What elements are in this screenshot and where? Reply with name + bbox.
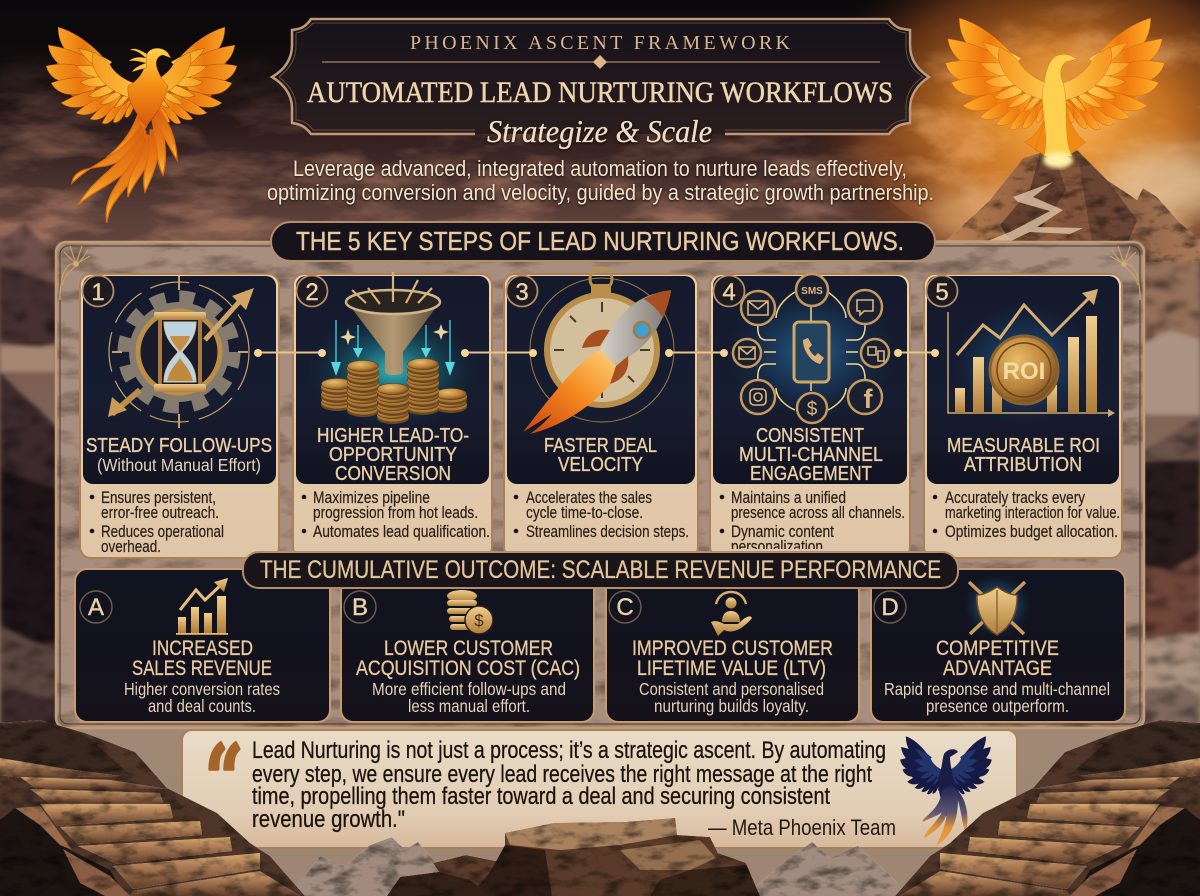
description — [124, 679, 280, 716]
quote text — [252, 737, 886, 833]
heading pill: cumulative outcome — [243, 552, 958, 588]
quote panel — [182, 725, 1017, 848]
card title — [317, 425, 469, 485]
clouds — [0, 50, 1200, 250]
quote text: revenue growth." — [252, 806, 405, 833]
quote mark: “ — [205, 725, 243, 833]
description: less manual effort. — [408, 696, 530, 716]
card title: FASTER DEAL — [544, 435, 657, 457]
quote text: time, propelling them faster toward a deal and securing consistent — [252, 783, 830, 810]
icon: phone with channels — [726, 274, 896, 423]
bullets: error-free outreach. — [101, 504, 219, 522]
number badge — [296, 276, 328, 306]
phoenix: navy logo — [900, 736, 992, 846]
icon: phone with channels: f — [864, 384, 874, 414]
icon: coins — [447, 590, 493, 634]
description: Leverage advanced, integrated automation to nurture leads effectively, — [293, 156, 907, 181]
badge — [344, 591, 376, 623]
bullets: presence across all channels. — [731, 504, 905, 522]
bullets: overhead. — [101, 538, 161, 556]
right side mountains — [1140, 235, 1200, 735]
left side mountains — [0, 222, 60, 735]
bullets — [90, 489, 224, 556]
volcano peak — [947, 150, 1200, 262]
mountain path — [975, 182, 1083, 246]
icon: ROI chart and coin: ROI — [1003, 358, 1045, 385]
bullets: cycle time-to-close. — [526, 504, 643, 522]
number badge — [714, 276, 744, 306]
central rock outcrop — [387, 818, 760, 896]
description: Higher conversion rates — [124, 679, 280, 699]
description: and deal counts. — [148, 696, 256, 716]
card title: MEASURABLE ROI — [947, 435, 1100, 457]
warm light around the peak base — [925, 185, 1045, 245]
card 2: lead to opportunity conversion — [293, 272, 492, 558]
title: LOWER CUSTOMER — [384, 637, 553, 660]
description — [267, 156, 934, 205]
bullets — [514, 489, 689, 541]
eyebrow: PHOENIX ASCENT FRAMEWORK — [410, 32, 791, 54]
title — [356, 637, 580, 680]
aura — [988, 45, 1128, 155]
card title: CONVERSION — [335, 463, 451, 485]
fire glow — [800, 0, 1200, 315]
title: COMPETITIVE — [936, 637, 1059, 660]
badge: C — [616, 594, 634, 621]
description: presence outperform. — [926, 696, 1069, 716]
corner filigree: top right — [1110, 246, 1140, 300]
phoenix: orange, top left — [46, 27, 237, 223]
icon: phone with channels: SMS — [801, 286, 823, 297]
icon: stopwatch and rocket — [523, 268, 674, 434]
description — [372, 679, 566, 716]
title: ADVANTAGE — [943, 657, 1052, 680]
badge — [609, 591, 641, 623]
distant mountains, foreground — [290, 837, 905, 896]
icon: phone with channels: $ — [807, 399, 818, 420]
icon: gear and hourglass — [108, 276, 254, 428]
connectors between steps — [254, 349, 939, 357]
card title — [739, 425, 883, 485]
main title: AUTOMATED LEAD NURTURING WORKFLOWS — [307, 76, 893, 109]
bullets: Maximizes pipeline — [313, 489, 430, 507]
icon: person in hand — [711, 592, 752, 636]
corner filigree: top left — [60, 246, 90, 300]
card title — [947, 435, 1100, 476]
card title — [544, 435, 657, 476]
heading pill: 5 key steps: THE 5 KEY STEPS OF LEAD NURTURING WORKFLOWS. — [296, 226, 904, 256]
title: IMPROVED CUSTOMER — [632, 637, 833, 660]
card title: ENGAGEMENT — [750, 463, 872, 485]
card title: (Without Manual Effort) — [97, 455, 261, 475]
subtitle: Strategize & Scale — [487, 113, 712, 149]
bullets — [933, 489, 1120, 541]
title: LIFETIME VALUE (LTV) — [637, 657, 826, 680]
card title: VELOCITY — [558, 454, 643, 476]
icon: coins: $ — [474, 611, 484, 630]
badge: A — [88, 594, 104, 621]
card title: OPPORTUNITY — [329, 444, 457, 466]
title: INCREASED — [152, 637, 253, 660]
card 5: measurable ROI attribution — [924, 274, 1122, 558]
bullets: Accelerates the sales — [526, 489, 652, 507]
quote text: Lead Nurturing is not just a process; it’s a strategic ascent. By automating — [252, 737, 886, 764]
number badge — [82, 276, 114, 306]
bullets: Automates lead qualification. — [313, 523, 490, 541]
title: ACQUISITION COST (CAC) — [356, 657, 580, 680]
outcome card C: improved LTV — [606, 569, 859, 722]
bullets — [720, 490, 904, 549]
phoenix: glowing, top right, rising from the peak — [945, 18, 1165, 168]
number badge: 2 — [305, 279, 319, 306]
outcome card D: competitive advantage — [871, 569, 1125, 722]
bullets: Accurately tracks every — [945, 489, 1086, 507]
description: More efficient follow-ups and — [372, 679, 566, 699]
divider with diamond — [322, 55, 880, 69]
card 3: faster deal velocity — [504, 268, 698, 558]
number badge: 5 — [935, 279, 949, 306]
bullets: Dynamic content — [731, 523, 834, 541]
number badge — [506, 276, 538, 306]
outcome card A: increased sales revenue — [75, 569, 330, 722]
badge: B — [352, 594, 368, 621]
outcome card B: lower CAC — [341, 569, 594, 722]
description: optimizing conversion and velocity, guided by a strategic growth partnership. — [267, 180, 934, 205]
bullets: Maintains a unified — [731, 489, 846, 507]
bullets: personalization — [731, 538, 823, 556]
card 4: multi-channel engagement — [710, 274, 910, 558]
number badge: 3 — [515, 279, 529, 306]
description: nurturing builds loyalty. — [654, 696, 809, 716]
description — [639, 679, 824, 716]
description: Rapid response and multi-channel — [884, 679, 1110, 699]
card title: MULTI-CHANNEL — [739, 444, 883, 466]
description: Consistent and personalised — [639, 679, 824, 699]
card title: ATTRIBUTION — [964, 454, 1082, 476]
bullets — [302, 489, 490, 541]
number badge — [926, 276, 958, 306]
stairs: bottom right — [895, 720, 1200, 896]
card title: STEADY FOLLOW-UPS — [86, 435, 272, 457]
bullets: marketing interaction for value. — [945, 504, 1120, 522]
heading pill: cumulative outcome: THE CUMULATIVE OUTCOME: SCALABLE REVENUE PERFORMANCE — [260, 556, 941, 584]
icon: funnel and coins — [308, 272, 478, 430]
title — [936, 637, 1059, 680]
icon: ROI chart and coin — [948, 289, 1115, 427]
card title: CONSISTENT — [756, 425, 864, 447]
badge: D — [881, 594, 899, 621]
title: SALES REVENUE — [132, 657, 272, 680]
badge — [80, 591, 112, 623]
main content panel — [56, 242, 1144, 728]
icon: shield and swords — [969, 582, 1025, 635]
title — [132, 637, 272, 680]
description — [884, 679, 1110, 716]
bullets: Reduces operational — [101, 523, 224, 541]
title plaque — [272, 19, 929, 134]
icon: rising bars — [176, 578, 228, 635]
card title: HIGHER LEAD-TO- — [317, 425, 469, 447]
number badge: 1 — [91, 279, 105, 306]
bullets: Ensures persistent, — [101, 489, 216, 507]
quote text: every step, we ensure every lead receives the right message at the right — [252, 761, 872, 788]
stairs: bottom left — [0, 720, 305, 896]
pale cloud bank on right — [1105, 147, 1200, 223]
card 1: steady follow-ups — [80, 274, 279, 558]
bullets: progression from hot leads. — [313, 504, 478, 522]
bullets: Streamlines decision steps. — [526, 523, 689, 541]
title — [632, 637, 833, 680]
badge — [874, 591, 906, 623]
card title — [86, 435, 272, 475]
bullets: Optimizes budget allocation. — [945, 523, 1118, 541]
attribution: — Meta Phoenix Team — [708, 815, 896, 840]
number badge: 4 — [722, 279, 736, 306]
